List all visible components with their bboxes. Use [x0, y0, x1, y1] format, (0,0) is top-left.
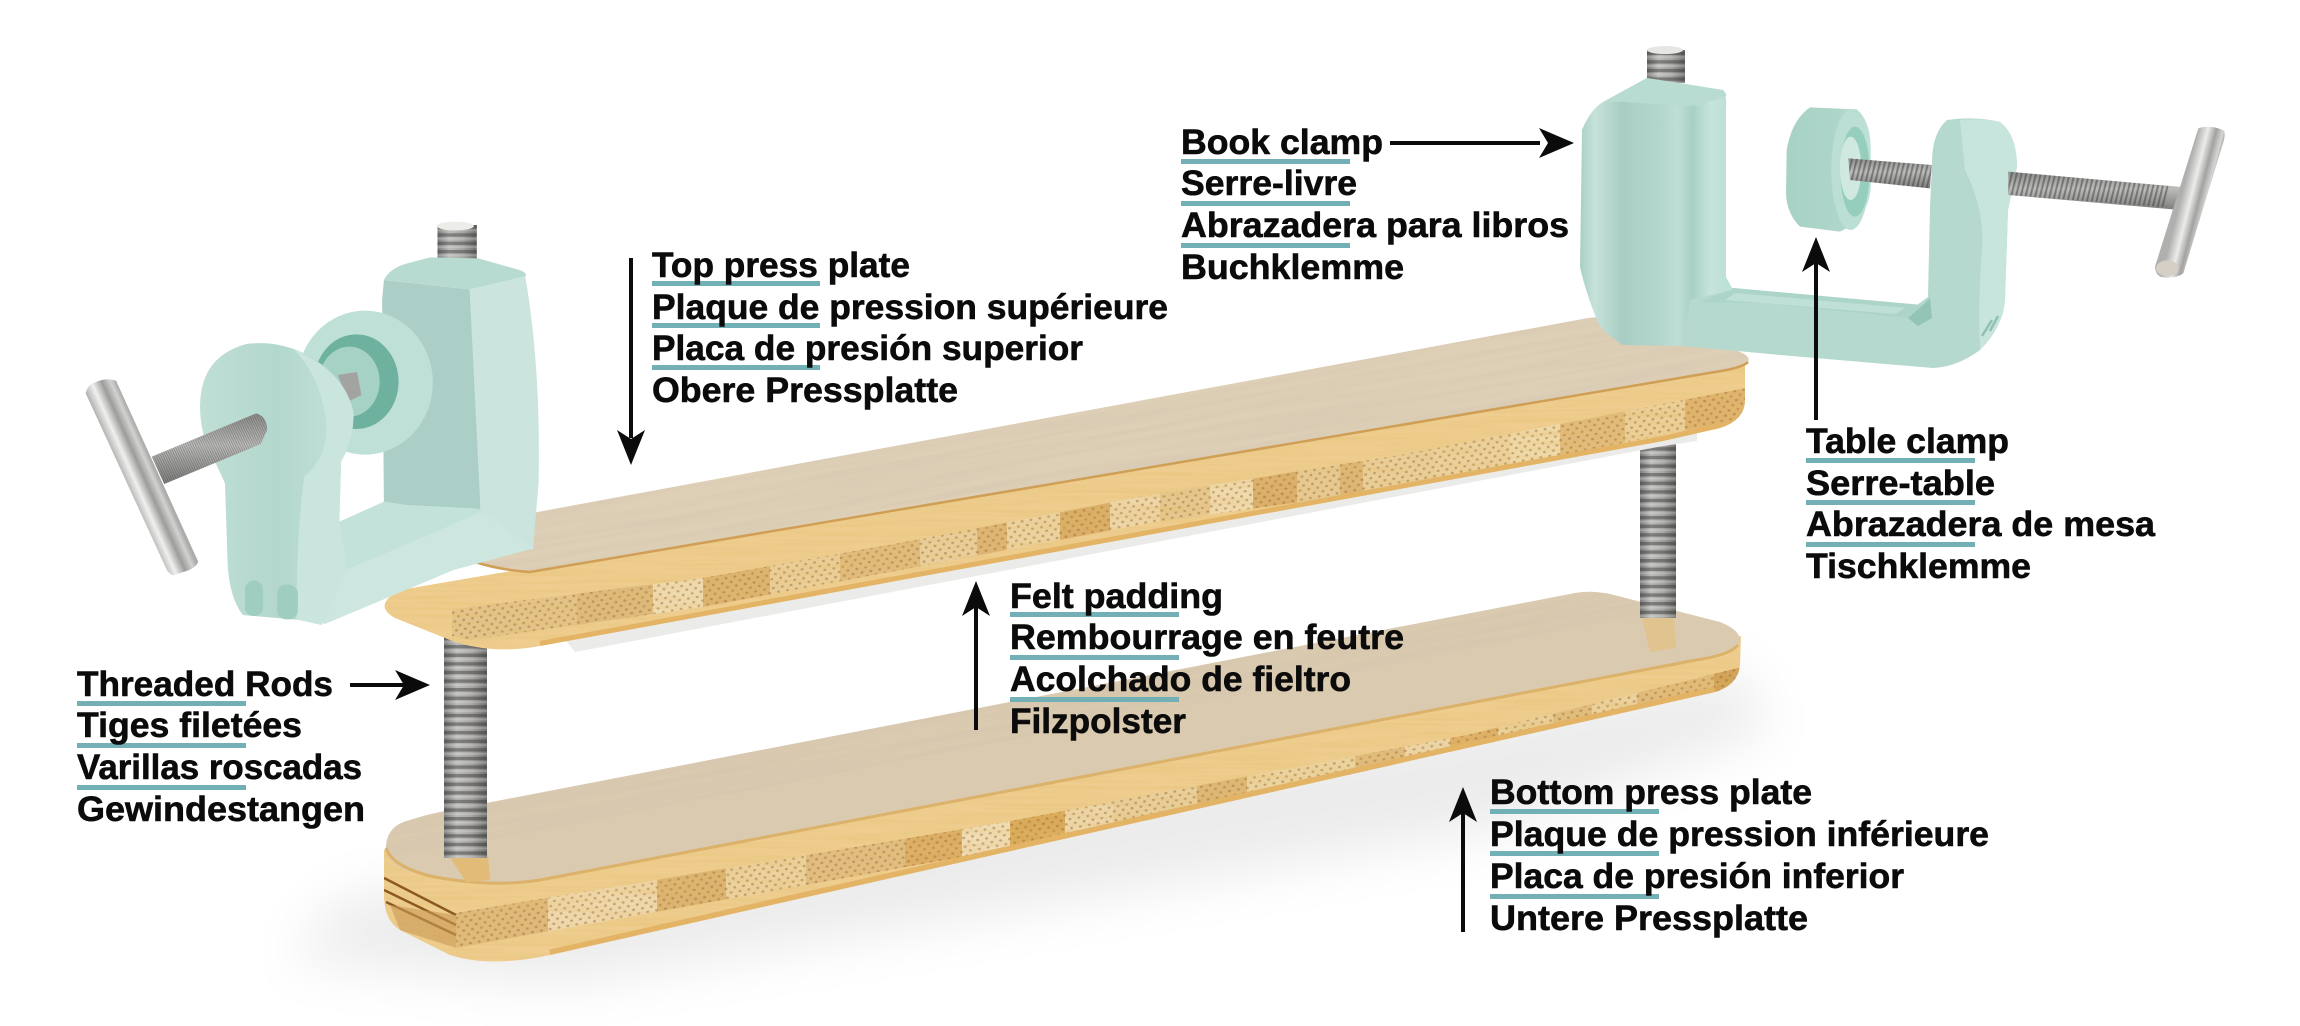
felt padding strip	[565, 433, 1697, 652]
text: Threaded Rods	[77, 665, 333, 704]
text: Buchklemme	[1181, 248, 1404, 287]
screw pad disc	[297, 311, 433, 455]
text	[1806, 422, 2156, 586]
text: Top press plate	[652, 246, 910, 285]
text: Plaque de pression inférieure	[1490, 815, 1989, 854]
top press plate	[384, 317, 1749, 650]
jaw bottom slots	[245, 581, 298, 619]
book clamp body	[382, 257, 539, 550]
text: Bottom press plate	[1490, 773, 1812, 812]
text: Book clamp	[1181, 123, 1383, 162]
arrow: threaded rods	[350, 670, 430, 700]
text: Placa de presión superior	[652, 329, 1083, 368]
bottom plate bamboo blocks	[456, 668, 1740, 948]
label: table clamp	[1806, 422, 2156, 586]
left rod	[444, 636, 487, 858]
underlines	[1490, 809, 1659, 899]
label: threaded rods	[77, 665, 365, 829]
left clamp	[86, 222, 539, 625]
screw pad disc	[1786, 107, 1871, 232]
underlines	[77, 701, 246, 790]
text: Gewindestangen	[77, 790, 365, 829]
arrow: felt padding	[962, 581, 990, 730]
text	[652, 246, 1168, 410]
underlines	[652, 281, 820, 370]
text: Filzpolster	[1010, 702, 1186, 741]
right clamp	[1580, 46, 2225, 368]
label: top press plate	[652, 246, 1168, 410]
threaded screw	[152, 413, 267, 484]
arrow: bottom press plate	[1449, 787, 1477, 932]
text: Untere Pressplatte	[1490, 899, 1808, 938]
underlines	[1181, 159, 1350, 248]
T handle	[86, 379, 198, 575]
arrow: table clamp	[1802, 237, 1830, 420]
T handle	[2155, 127, 2225, 278]
text: Serre-table	[1806, 464, 1995, 503]
top plate bamboo blocks	[452, 388, 1745, 639]
label: bottom press plate	[1490, 773, 1989, 938]
threaded post stub	[1647, 46, 1685, 83]
label: book clamp	[1181, 123, 1569, 287]
label: felt padding	[1010, 577, 1404, 741]
table screw	[1848, 158, 2185, 210]
threaded post stub	[437, 222, 477, 263]
text	[1490, 773, 1989, 938]
top plate edge	[384, 366, 1745, 650]
text	[1181, 123, 1569, 287]
text: Obere Pressplatte	[652, 371, 958, 410]
text: Abrazadera para libros	[1181, 206, 1569, 245]
text: Tiges filetées	[77, 706, 302, 745]
bottom plate edge	[384, 636, 1741, 962]
text: Acolchado de fieltro	[1010, 660, 1351, 699]
text	[1010, 577, 1404, 741]
bottom press plate	[384, 592, 1741, 962]
arrow: book clamp	[1390, 128, 1574, 158]
text: Serre-livre	[1181, 164, 1357, 203]
text: Tischklemme	[1806, 547, 2031, 586]
bottom plate top face	[384, 592, 1740, 885]
text: Abrazadera de mesa	[1806, 505, 2156, 544]
top plate top face	[476, 317, 1749, 574]
text	[77, 665, 365, 829]
clamp base arm	[307, 502, 534, 624]
text: Table clamp	[1806, 422, 2009, 461]
underlines	[1806, 458, 1975, 547]
right rod	[1640, 436, 1676, 618]
underlines	[1010, 612, 1179, 702]
floor shadow	[290, 670, 1770, 985]
text: Rembourrage en feutre	[1010, 618, 1404, 657]
front jaw	[200, 343, 354, 625]
text: Varillas roscadas	[77, 748, 362, 787]
arrow: top press plate	[617, 258, 645, 465]
book clamp body	[1580, 78, 1733, 346]
threaded rods	[444, 436, 1676, 858]
text: Placa de presión inferior	[1490, 857, 1904, 896]
text: Plaque de pression supérieure	[652, 288, 1168, 327]
arm and table jaw	[1683, 118, 2017, 368]
text: Felt padding	[1010, 577, 1223, 616]
